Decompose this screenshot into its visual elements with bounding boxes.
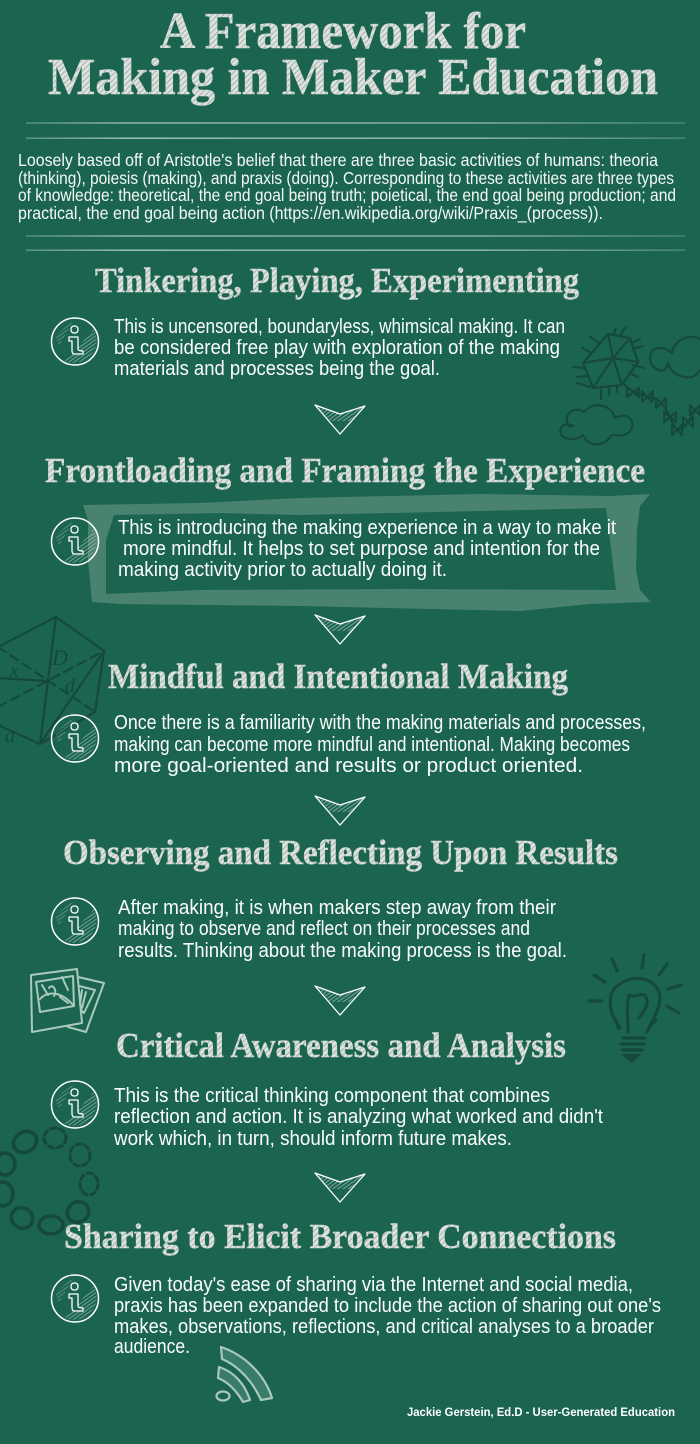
divider lines	[26, 123, 685, 138]
text block: After making, it is when makers step away from their	[118, 897, 556, 919]
icon: info	[52, 1275, 98, 1322]
text block: making can become more mindful and intentional. Making becomes	[114, 734, 630, 756]
illustration: light bulb	[589, 955, 681, 1063]
arrow	[315, 405, 365, 434]
illustration: photographs	[31, 969, 104, 1032]
text block	[113, 1085, 603, 1150]
text block: making to observe and reflect on their processes and	[118, 918, 530, 940]
title	[48, 3, 658, 106]
text block	[118, 897, 567, 962]
intro text: practical, the end goal being action (https://en.wikipedia.org/wiki/Praxis_(process)).	[18, 203, 603, 224]
text block: Once there is a familiarity with the making materials and processes,	[114, 712, 646, 734]
illustration: geometric solid: x	[9, 660, 19, 682]
text block: results. Thinking about the making process is the goal.	[118, 940, 567, 962]
text block	[114, 1274, 661, 1358]
text block: materials and processes being the goal.	[114, 358, 440, 380]
text block: be considered free play with exploration of the making	[114, 337, 560, 359]
icon: info	[52, 898, 98, 945]
icon: info	[52, 1081, 98, 1128]
illustration: geometric solid: D	[51, 645, 68, 670]
text block: praxis has been expanded to include the action of sharing out one's	[114, 1295, 661, 1317]
heading: Tinkering, Playing, Experimenting	[95, 261, 579, 300]
icon: info	[52, 715, 98, 762]
icon: info	[52, 518, 98, 565]
arrow	[315, 1173, 365, 1202]
divider lines	[26, 236, 685, 250]
credit: Jackie Gerstein, Ed.D - User-Generated Education	[407, 1407, 675, 1419]
title: Making in Maker Education	[48, 49, 658, 106]
text block: more goal-oriented and results or product oriented.	[114, 755, 583, 777]
heading: Sharing to Elicit Broader Connections	[64, 1217, 616, 1256]
text block	[114, 316, 565, 380]
arrow	[315, 986, 365, 1015]
text block	[114, 712, 646, 777]
text block	[118, 517, 616, 581]
arrow	[315, 615, 365, 644]
section: mindful	[52, 657, 646, 777]
section: observing	[52, 833, 618, 962]
brush frame	[83, 494, 651, 611]
intro text	[18, 150, 676, 224]
illustration: kite and clouds	[560, 327, 700, 444]
text block: Given today's ease of sharing via the Internet and social media,	[114, 1274, 633, 1296]
heading: Critical Awareness and Analysis	[116, 1026, 566, 1065]
text block: making activity prior to actually doing it.	[118, 559, 447, 581]
text block: This is the critical thinking component that combines	[114, 1085, 550, 1107]
arrow	[315, 796, 365, 825]
illustration: geometric solid: d	[65, 675, 76, 697]
heading: Mindful and Intentional Making	[108, 657, 568, 696]
text block: reflection and action. It is analyzing what worked and didn't	[114, 1106, 603, 1128]
section: critical	[52, 1026, 603, 1150]
illustration: RSS symbol	[216, 1347, 272, 1402]
heading: Observing and Reflecting Upon Results	[63, 833, 618, 872]
illustration: geometric solid: a	[5, 725, 15, 747]
heading: Frontloading and Framing the Experience	[45, 451, 645, 490]
illustration: geometric solid	[0, 617, 104, 747]
text block: more mindful. It helps to set purpose and intention for the	[123, 538, 600, 560]
title: A Framework for	[160, 3, 526, 60]
text block: This is uncensored, boundaryless, whimsical making. It can	[114, 316, 565, 338]
section: sharing	[52, 1217, 661, 1358]
section: frontloading	[45, 451, 651, 611]
illustration: chain links	[0, 1127, 98, 1234]
icon: info	[52, 318, 98, 365]
section: tinkering	[52, 261, 579, 380]
text block: work which, in turn, should inform future makes.	[113, 1128, 512, 1150]
text block: makes, observations, reflections, and critical analyses to a broader	[114, 1316, 654, 1338]
text block: This is introducing the making experience in a way to make it	[118, 517, 616, 539]
text block: audience.	[114, 1336, 190, 1358]
